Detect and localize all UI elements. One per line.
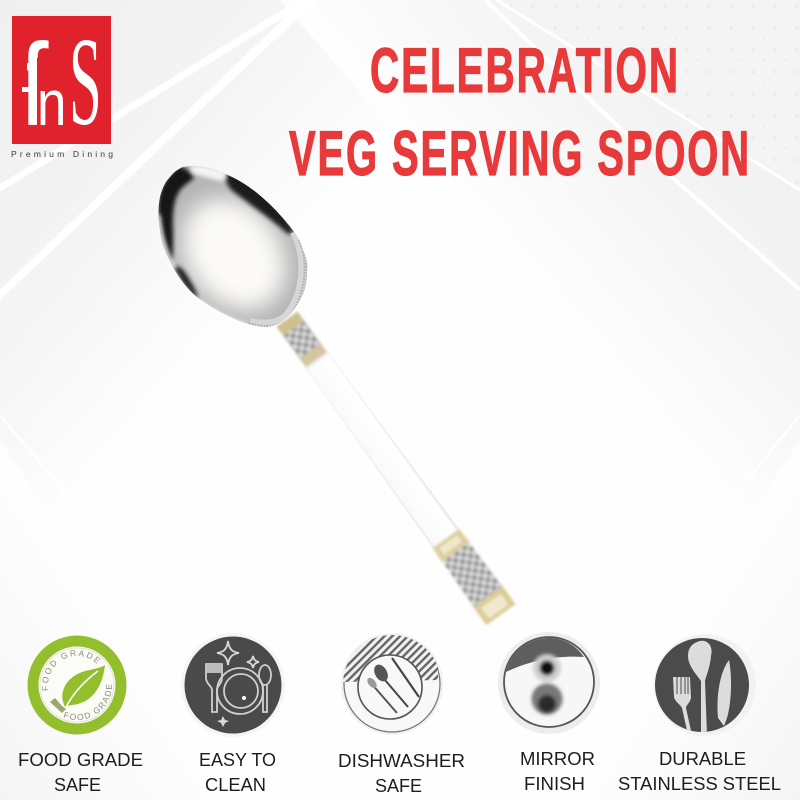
label: DISHWASHER [338, 750, 465, 771]
logo: FnS Premium Dining [11, 13, 113, 159]
icon: food grade seal [28, 636, 126, 734]
label: STAINLESS STEEL [618, 773, 781, 794]
label: SAFE [375, 775, 422, 796]
icon: food grade seal: FOOD GRADE [42, 650, 101, 690]
lower collar [431, 528, 516, 625]
bowl rim detail [250, 232, 302, 324]
logo tagline: Premium Dining [11, 149, 113, 159]
label: EASY TO [199, 749, 276, 770]
logo letters: n [37, 68, 66, 139]
bowl dark reflections [158, 166, 294, 299]
logo letters [22, 40, 98, 125]
label: DURABLE [659, 748, 746, 769]
bowl top glare [190, 165, 226, 181]
label: CLEAN [205, 774, 266, 795]
icon: mirror spheres [498, 632, 600, 734]
icon: plate with cutlery [340, 630, 443, 735]
logo letters: f [19, 19, 49, 150]
icon: fork, spoon and knife [654, 634, 756, 736]
feature: mirror finish [498, 632, 600, 794]
label: FINISH [524, 773, 585, 794]
label: SAFE [54, 774, 101, 795]
icon: plate and cutlery with sparkles [181, 633, 285, 737]
bowl highlight [174, 187, 296, 320]
bowl lower-left light edge [158, 215, 258, 328]
upper collar [276, 311, 329, 370]
icon: food grade seal: FOOD GRADE [64, 684, 112, 720]
feature: durable stainless steel [618, 634, 781, 794]
label: FOOD GRADE [18, 749, 143, 770]
spoon bowl [158, 166, 308, 327]
label: MIRROR [520, 748, 595, 769]
spoon handle [272, 308, 516, 625]
product photo: serving spoon [150, 160, 516, 625]
logo letters: S [69, 13, 102, 152]
feature: dishwasher safe [338, 630, 465, 796]
title [289, 36, 751, 189]
feature: easy to clean [181, 633, 285, 795]
logo red square [12, 16, 111, 144]
feature: food grade safe [18, 636, 143, 795]
